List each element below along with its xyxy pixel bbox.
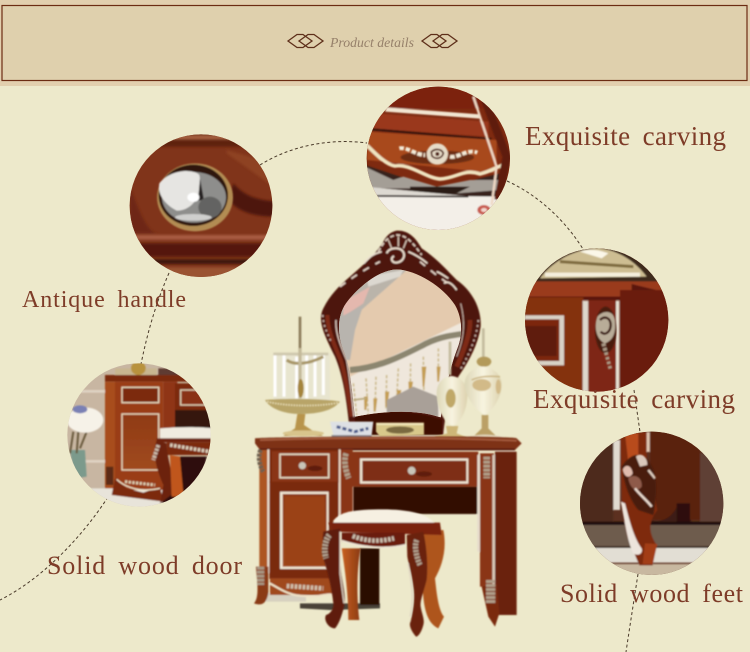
ornate boxes (330, 422, 433, 443)
dashed connector lines (0, 142, 640, 652)
apron and feet (270, 578, 335, 595)
label: Exquisite carving top: Exquisite carving (525, 121, 726, 151)
label: Solid wood door: Solid wood door (47, 551, 242, 580)
carvings on table (259, 450, 263, 472)
right drawer (352, 452, 478, 487)
drawer knobs (299, 462, 306, 469)
table back and shadow (300, 603, 380, 610)
label: Exquisite carving lower: Exquisite carving (533, 384, 735, 414)
header banner (0, 0, 750, 86)
dressing table (254, 436, 522, 627)
mirror (321, 231, 481, 435)
left pedestal (259, 450, 268, 570)
detail circle: antique handle (127, 133, 277, 281)
label: Antique handle: Antique handle (22, 287, 186, 313)
detail circle: solid wood feet (578, 430, 727, 577)
label: Solid wood feet: Solid wood feet (560, 579, 744, 608)
mirror frame (321, 231, 481, 435)
detail circle: solid wood door (67, 362, 214, 508)
stool (322, 509, 445, 637)
mirror glass reflection (339, 269, 462, 418)
right leg (477, 455, 480, 552)
vanity with mirror, ornaments and stool (254, 231, 522, 637)
heading: Product details: Product details (329, 36, 415, 51)
detail circle: exquisite carving corner (523, 247, 670, 397)
icon: left double diamond ornament (288, 34, 323, 48)
carved rose (595, 307, 616, 370)
table urns (435, 328, 502, 442)
detail circle: exquisite carving top (365, 85, 512, 233)
fruit stand with glass beads (265, 317, 367, 436)
carved rose on leg (622, 455, 656, 515)
carved rose ornament (399, 143, 477, 165)
table top (255, 436, 522, 450)
icon: right double diamond ornament (422, 34, 457, 48)
